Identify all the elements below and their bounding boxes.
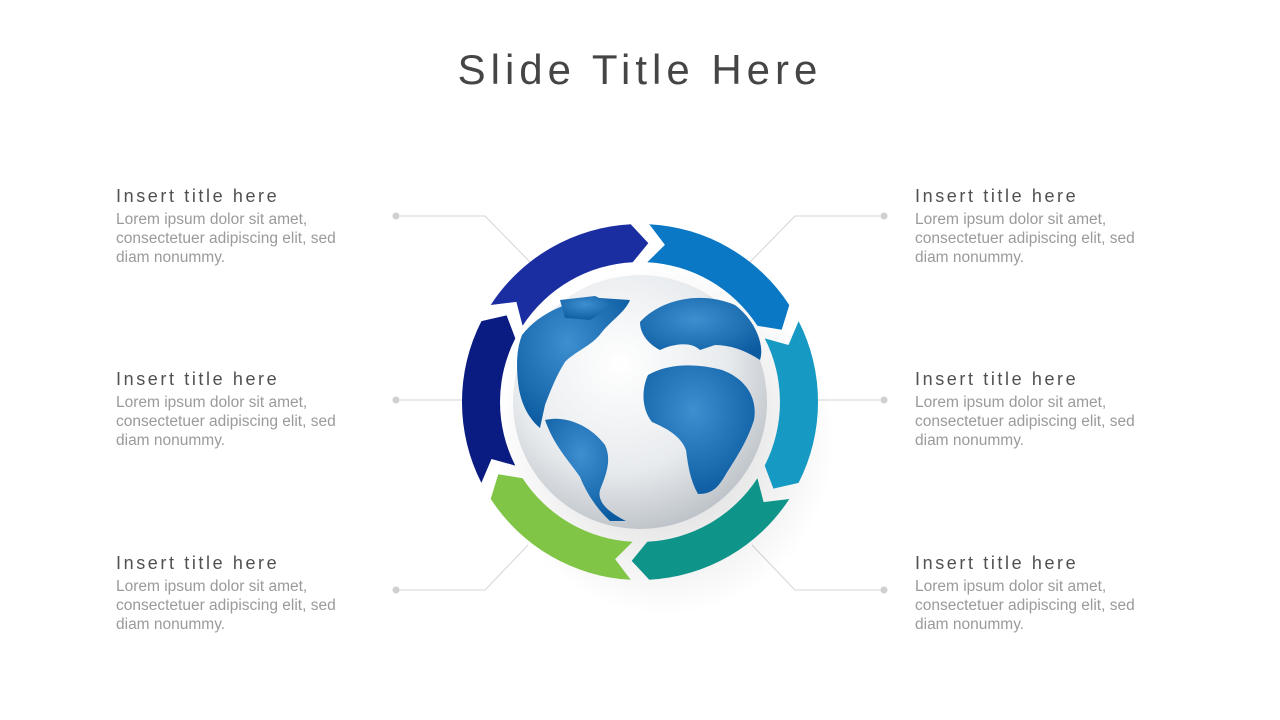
text block: left bottom: Lorem ipsum dolor sit amet, consectetuer adipiscing elit, sed diam nonummy.	[116, 578, 336, 633]
arrow ring	[411, 184, 869, 620]
text block: left bottom	[116, 553, 336, 633]
text block: left top: Insert title here	[116, 186, 279, 206]
title: Slide Title Here	[458, 46, 822, 93]
text block: right top: Lorem ipsum dolor sit amet, consectetuer adipiscing elit, sed diam nonummy.	[915, 211, 1135, 266]
text block: right middle: Lorem ipsum dolor sit amet, consectetuer adipiscing elit, sed diam nonummy.	[915, 394, 1135, 449]
text block: right top: Insert title here	[915, 186, 1078, 206]
text block: left middle: Lorem ipsum dolor sit amet, consectetuer adipiscing elit, sed diam nonummy.	[116, 394, 336, 449]
text block: right top	[915, 186, 1135, 266]
text block: left bottom: Insert title here	[116, 553, 279, 573]
continents	[517, 296, 761, 521]
text block: right bottom: Lorem ipsum dolor sit amet, consectetuer adipiscing elit, sed diam nonummy.	[915, 578, 1135, 633]
text block: right middle	[915, 369, 1135, 449]
text block: left middle: Insert title here	[116, 369, 279, 389]
connector lines	[396, 216, 884, 590]
text block: right middle: Insert title here	[915, 369, 1078, 389]
text block: right bottom	[915, 553, 1135, 633]
text block: left top	[116, 186, 336, 266]
text block: left middle	[116, 369, 336, 449]
globe	[513, 275, 767, 529]
text block: left top: Lorem ipsum dolor sit amet, consectetuer adipiscing elit, sed diam nonummy.	[116, 211, 336, 266]
text block: right bottom: Insert title here	[915, 553, 1078, 573]
shadow	[495, 265, 835, 615]
